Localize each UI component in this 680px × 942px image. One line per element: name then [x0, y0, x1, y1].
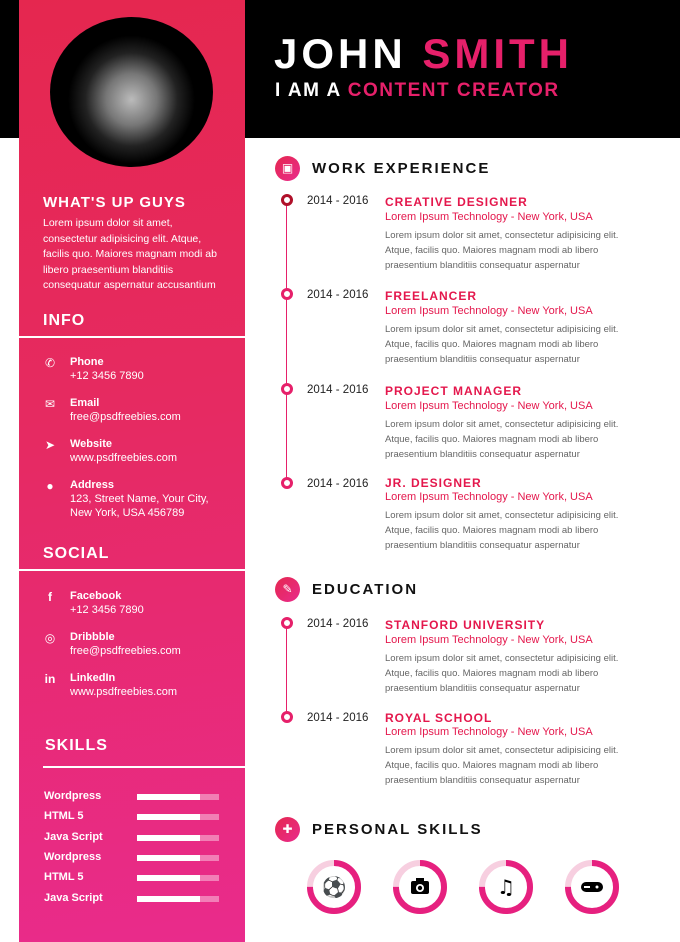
skill bars: Java Script	[44, 831, 103, 843]
social: dribbble: ◎	[45, 631, 55, 645]
info: phone: Phone	[70, 356, 104, 368]
job 4: praesentium blanditiis consequatur aspernatur	[385, 540, 580, 551]
info: address: ●	[46, 479, 54, 493]
job 3: praesentium blanditiis consequatur aspernatur	[385, 449, 580, 460]
job 3: Lorem ipsum dolor sit amet, consectetur adipisicing elit.	[385, 419, 618, 430]
edu 2: Atque, facilis quo. Maiores magnam modi ab libero	[385, 760, 598, 771]
education line	[286, 624, 287, 718]
photo	[50, 17, 213, 167]
skill bars: HTML 5	[44, 871, 84, 883]
skill bars: HTML 5	[44, 810, 84, 822]
job 2: 2014 - 2016	[307, 289, 368, 301]
education heading	[275, 577, 418, 602]
name title: JOHN SMITH	[274, 30, 573, 77]
edu 2: Lorem Ipsum Technology - New York, USA	[385, 726, 593, 738]
about text	[43, 217, 217, 291]
header band	[0, 0, 680, 138]
about text: libero praesentium blanditiis	[43, 264, 173, 276]
edu 1: 2014 - 2016	[307, 618, 368, 630]
edu 1: Atque, facilis quo. Maiores magnam modi ab libero	[385, 668, 598, 679]
job 2: Atque, facilis quo. Maiores magnam modi ab libero	[385, 339, 598, 350]
info: website: Website	[70, 438, 112, 450]
job 2: praesentium blanditiis consequatur aspernatur	[385, 354, 580, 365]
about text: Lorem ipsum dolor sit amet,	[43, 217, 173, 229]
skill donuts	[307, 860, 619, 914]
social: dribbble	[45, 631, 181, 657]
personal skills heading: PERSONAL SKILLS	[312, 821, 483, 838]
skill bars: Java Script	[44, 892, 103, 904]
info: phone: +12 3456 7890	[70, 370, 144, 382]
edu 2: ROYAL SCHOOL	[385, 711, 492, 725]
job 2	[281, 288, 618, 365]
about text: consequatur aspernatur accusantium	[43, 279, 216, 291]
job 4: 2014 - 2016	[307, 478, 368, 490]
edu 2	[281, 711, 618, 786]
work experience heading: WORK EXPERIENCE	[312, 160, 490, 177]
social: linkedin: LinkedIn	[70, 672, 115, 684]
job 3: 2014 - 2016	[307, 384, 368, 396]
skill bars: Wordpress	[44, 851, 101, 863]
edu 2: Lorem ipsum dolor sit amet, consectetur adipisicing elit.	[385, 745, 618, 756]
edu 1: Lorem Ipsum Technology - New York, USA	[385, 634, 593, 646]
about text: consectetur adipisicing elit. Atque,	[43, 232, 201, 244]
education heading: EDUCATION	[312, 581, 418, 598]
job 4: Atque, facilis quo. Maiores magnam modi ab libero	[385, 525, 598, 536]
edu 2: 2014 - 2016	[307, 712, 368, 724]
job 4: JR. DESIGNER	[385, 476, 482, 490]
info: email: ✉	[45, 397, 55, 411]
job 1: Atque, facilis quo. Maiores magnam modi ab libero	[385, 245, 598, 256]
job 1: Lorem ipsum dolor sit amet, consectetur adipisicing elit.	[385, 230, 618, 241]
personal skills heading	[275, 817, 483, 842]
social: linkedin: in	[45, 672, 55, 686]
about text: facilis quo. Maiores magnam modi ab	[43, 248, 217, 260]
info: address: New York, USA 456789	[70, 507, 184, 519]
social: dribbble: Dribbble	[70, 631, 115, 643]
info: website: www.psdfreebies.com	[70, 452, 177, 464]
info: email: free@psdfreebies.com	[70, 411, 181, 423]
job 2: FREELANCER	[385, 289, 477, 303]
skills heading: SKILLS	[45, 737, 108, 754]
info: phone	[45, 356, 144, 382]
skill bars: Wordpress	[44, 790, 101, 802]
subtitle: I AM A CONTENT CREATOR	[275, 80, 560, 101]
job 1	[281, 194, 618, 271]
edu 1: STANFORD UNIVERSITY	[385, 618, 545, 632]
social: facebook: Facebook	[70, 590, 121, 602]
job 3: Lorem Ipsum Technology - New York, USA	[385, 400, 593, 412]
education heading: ✎	[282, 582, 293, 596]
work experience heading: ▣	[282, 161, 293, 175]
timeline line	[286, 201, 287, 486]
work experience heading	[275, 156, 490, 181]
edu 1: Lorem ipsum dolor sit amet, consectetur adipisicing elit.	[385, 653, 618, 664]
job 3: PROJECT MANAGER	[385, 384, 522, 398]
social: dribbble: free@psdfreebies.com	[70, 645, 181, 657]
edu 2: praesentium blanditiis consequatur aspernatur	[385, 775, 580, 786]
social: linkedin	[45, 672, 177, 698]
edu 1: praesentium blanditiis consequatur aspernatur	[385, 683, 580, 694]
info: address: 123, Street Name, Your City,	[70, 493, 209, 505]
job 1: CREATIVE DESIGNER	[385, 195, 528, 209]
job 1: praesentium blanditiis consequatur aspernatur	[385, 260, 580, 271]
job 3: Atque, facilis quo. Maiores magnam modi ab libero	[385, 434, 598, 445]
info: email	[45, 397, 181, 423]
job 3	[281, 383, 618, 460]
job 1: Lorem Ipsum Technology - New York, USA	[385, 211, 593, 223]
skill donuts: ♫	[497, 875, 515, 899]
info: address	[46, 479, 209, 519]
social: linkedin: www.psdfreebies.com	[70, 686, 177, 698]
sidebar	[19, 0, 245, 942]
job 4	[281, 476, 618, 551]
social: facebook	[48, 590, 144, 616]
skill bars	[44, 790, 219, 904]
job 1: 2014 - 2016	[307, 195, 368, 207]
social: facebook: f	[48, 590, 52, 604]
personal skills heading: ✚	[282, 822, 293, 836]
job 2: Lorem ipsum dolor sit amet, consectetur adipisicing elit.	[385, 324, 618, 335]
info: website: ➤	[45, 438, 55, 452]
social: facebook: +12 3456 7890	[70, 604, 144, 616]
about heading: WHAT'S UP GUYS	[43, 194, 186, 211]
info: address: Address	[70, 479, 114, 491]
skill donuts: ⚽	[321, 875, 346, 899]
info: email: Email	[70, 397, 99, 409]
edu 1	[281, 617, 618, 694]
job 4: Lorem Ipsum Technology - New York, USA	[385, 491, 593, 503]
info: website	[45, 438, 177, 464]
info: phone: ✆	[45, 356, 55, 370]
info heading: INFO	[43, 312, 85, 329]
job 2: Lorem Ipsum Technology - New York, USA	[385, 305, 593, 317]
social heading: SOCIAL	[43, 545, 109, 562]
job 4: Lorem ipsum dolor sit amet, consectetur adipisicing elit.	[385, 510, 618, 521]
